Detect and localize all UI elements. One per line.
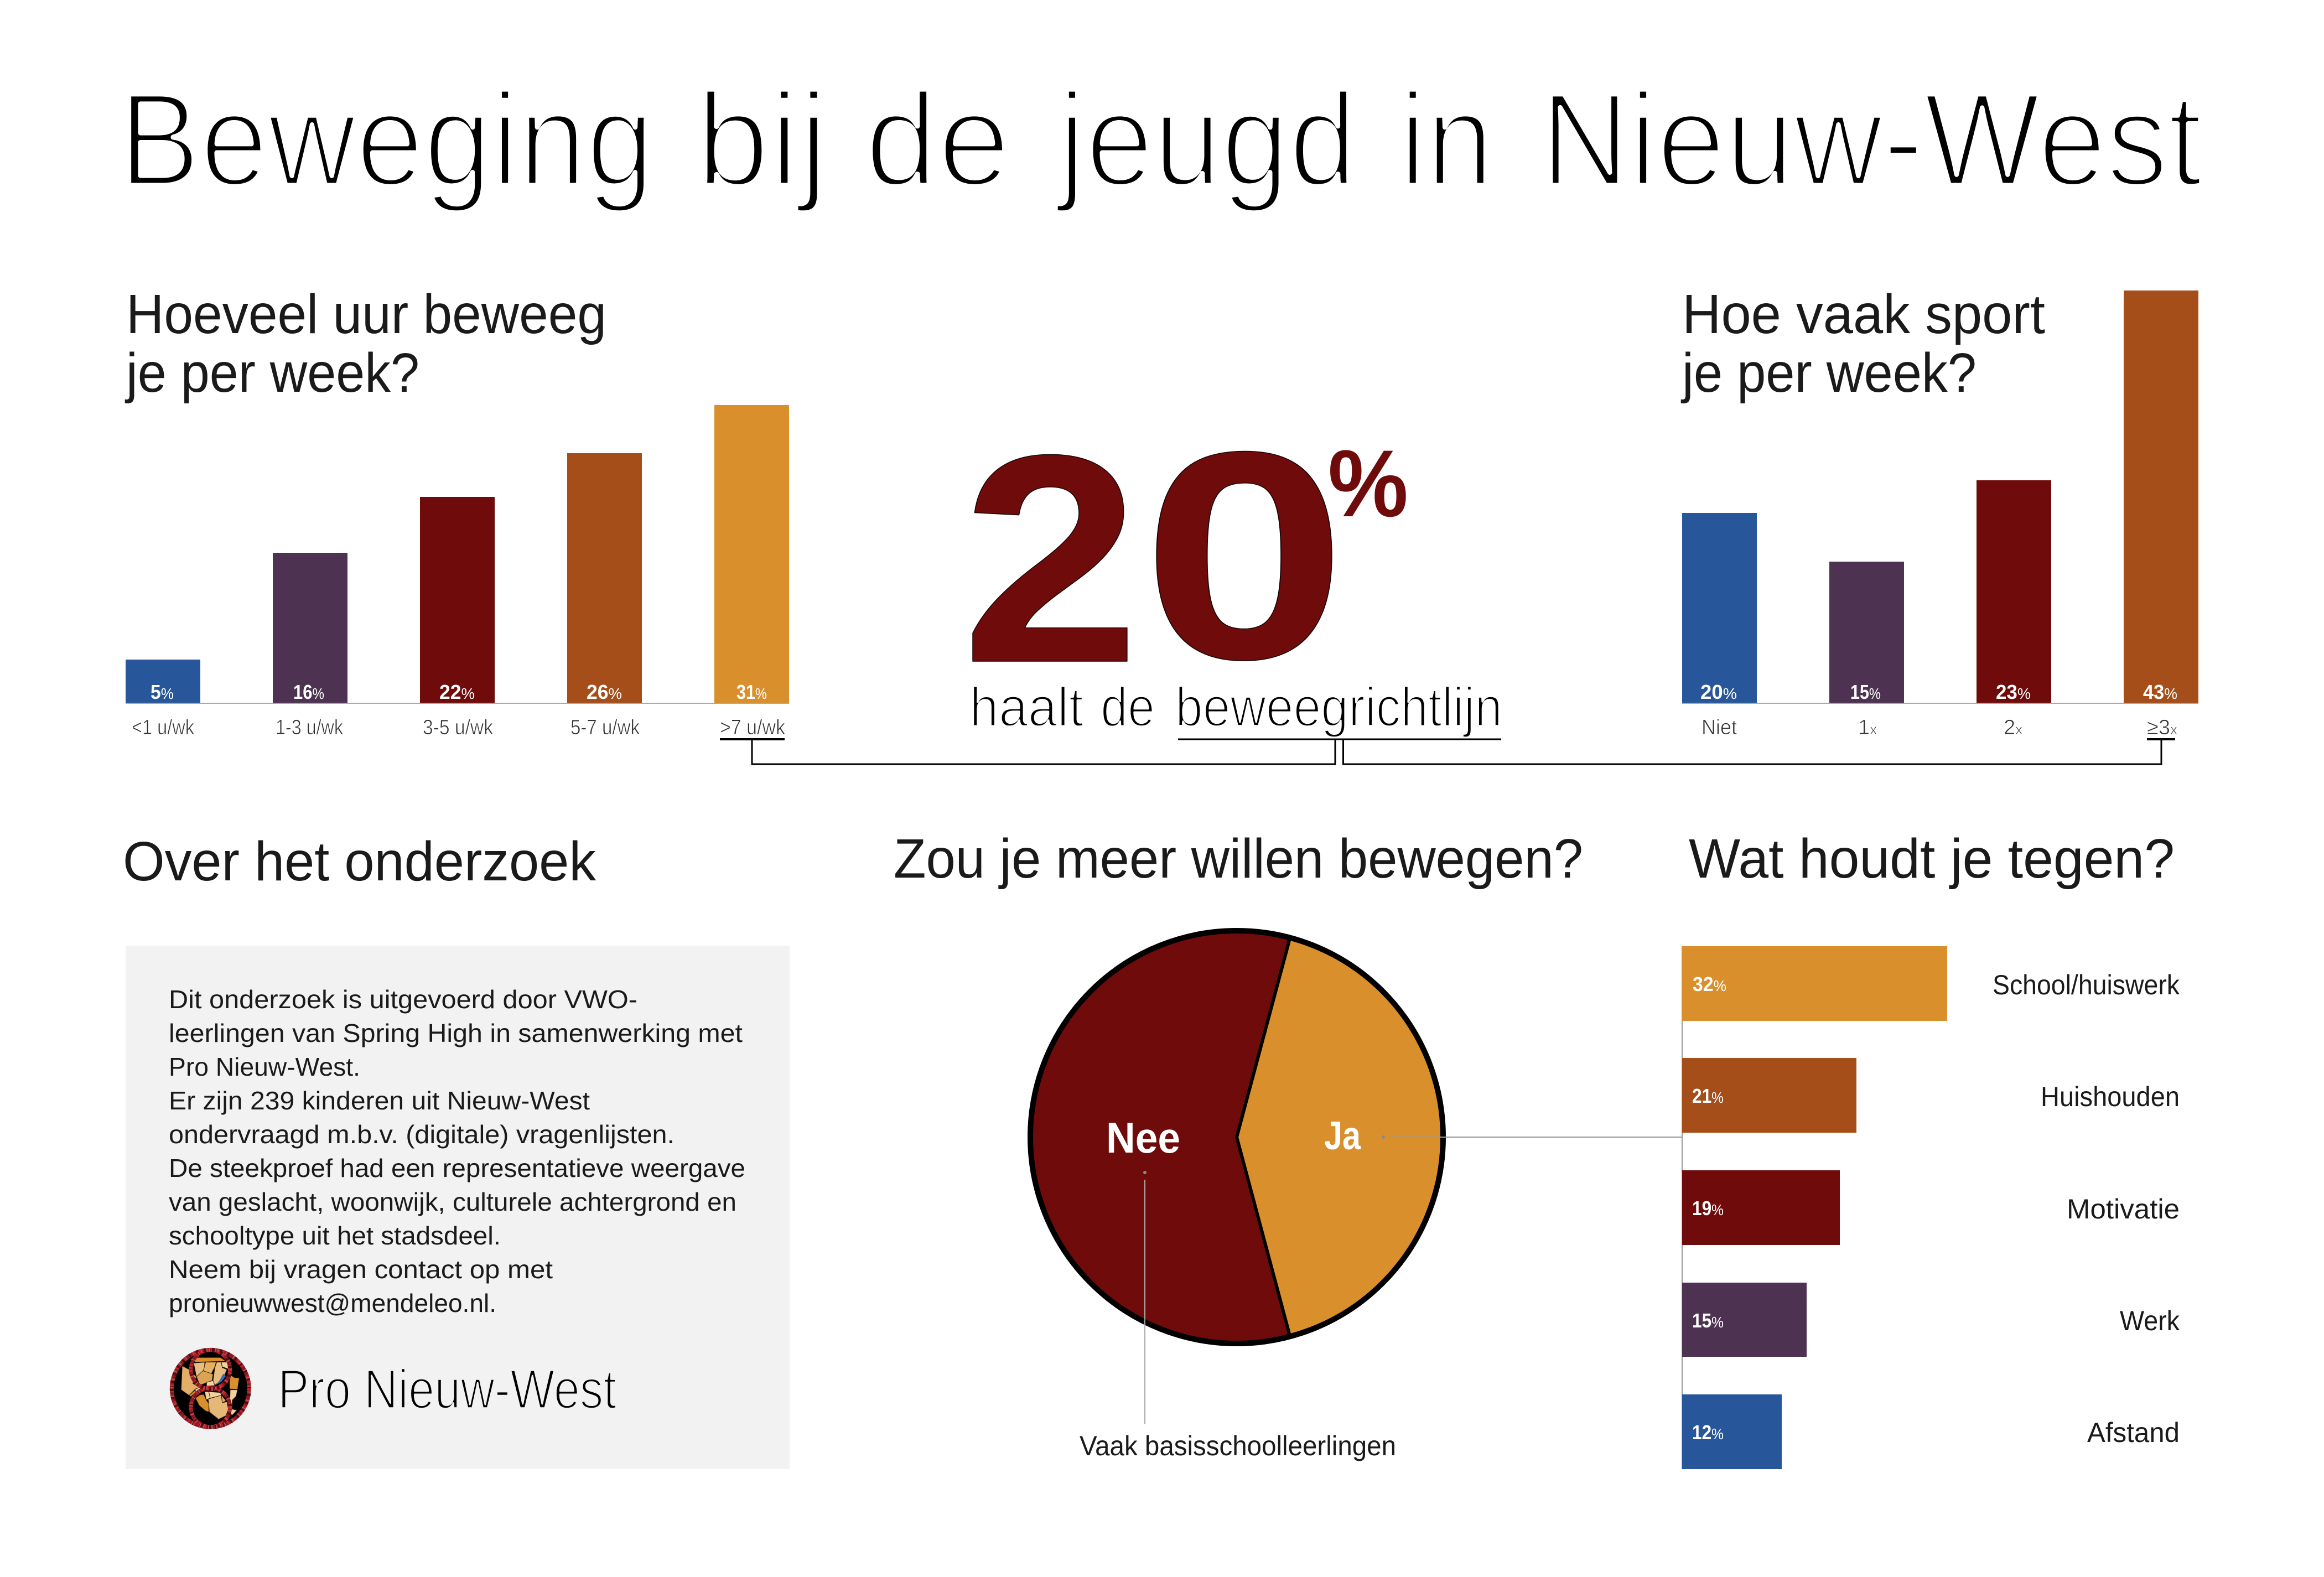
bar: 1-3 hours: 16% xyxy=(293,681,324,703)
bar: three or more: 43% xyxy=(2143,681,2177,703)
text block: research description: Er zijn 239 kinderen uit Nieuw-West xyxy=(169,1086,590,1115)
bar: school: School/huiswerk xyxy=(1993,969,2180,1000)
text block: research description: schooltype uit het stadsdeel. xyxy=(169,1221,501,1250)
text block: research description: Neem bij vragen contact op met xyxy=(169,1255,553,1284)
big number: 20 percent: 0 xyxy=(1142,391,1347,721)
text block: research description: pronieuwwest@mendeleo.nl. xyxy=(169,1289,496,1317)
icon: Pro Nieuw-West logo xyxy=(172,1350,249,1427)
bar: distance: Afstand xyxy=(2087,1417,2180,1448)
bar: twice xyxy=(1977,480,2051,703)
bar: school: 32% xyxy=(1693,973,1726,995)
logo wordmark: Pro Nieuw-West xyxy=(278,1358,616,1420)
title: in xyxy=(1399,65,1493,214)
bar: more than 7 hours: 31% xyxy=(736,681,767,703)
callout: no line xyxy=(1143,1171,1147,1424)
callout: yes leads to reasons xyxy=(1382,1135,1682,1139)
bar: distance: 12% xyxy=(1692,1421,1724,1444)
heading: hours per week: Hoeveel uur beweeg xyxy=(126,283,606,345)
text block: research description: Dit onderzoek is uitgevoerd door VWO- xyxy=(169,985,637,1014)
panel: hours per week chart xyxy=(124,283,789,739)
axis labels: 1-3 u/wk xyxy=(276,716,344,739)
pie label: no: Nee xyxy=(1106,1113,1180,1162)
axis labels: 1x xyxy=(1858,716,1877,739)
text block: research description: De steekproef had een representatieve weergave xyxy=(169,1154,745,1182)
bar: 5-7 hours xyxy=(567,453,642,703)
bar: once: 15% xyxy=(1850,681,1881,703)
text block: research description: ondervraagd m.b.v. (digitale) vragenlijsten. xyxy=(169,1120,675,1149)
panel: sports frequency chart xyxy=(1680,283,2198,739)
bar: 5-7 hours: 26% xyxy=(587,681,622,703)
axis labels: >7 u/wk xyxy=(720,716,786,739)
axis labels: ≥3x xyxy=(2147,716,2177,739)
axis labels: 5-7 u/wk xyxy=(570,716,640,739)
bar: three or more xyxy=(2124,290,2198,703)
title: de xyxy=(865,65,1010,214)
big number: 20 percent: 2 xyxy=(962,394,1140,724)
title: Beweging xyxy=(119,65,654,214)
bar: work xyxy=(1682,1283,2180,1357)
heading: how often do you sport xyxy=(1680,283,2045,404)
bar: motivation: Motivatie xyxy=(2067,1194,2180,1225)
axis labels: 3-5 u/wk xyxy=(423,716,494,739)
heading: how often do you sport: Hoe vaak sport xyxy=(1682,283,2045,345)
title xyxy=(119,65,2202,214)
subtitle: reaches the guideline xyxy=(969,676,1502,738)
axis labels xyxy=(132,716,786,739)
bar: not: 20% xyxy=(1700,681,1737,703)
bar: household xyxy=(1682,1058,2180,1133)
text block: research description: leerlingen van Spring High in samenwerking met xyxy=(169,1019,743,1047)
title: jeugd xyxy=(1055,65,1357,214)
heading: what holds you back: Wat houdt je tegen? xyxy=(1689,828,2175,890)
axis labels: 2x xyxy=(2004,716,2022,739)
axis labels: <1 u/wk xyxy=(132,716,195,739)
heading: how often do you sport: je per week? xyxy=(1680,342,1977,404)
bar: 3-5 hours xyxy=(420,497,495,703)
bar: school xyxy=(1682,946,2180,1021)
axis labels: Niet xyxy=(1702,716,1737,739)
bar: distance xyxy=(1682,1394,2180,1469)
pie label: yes: Ja xyxy=(1324,1114,1361,1158)
bar: motivation xyxy=(1682,1170,2180,1245)
heading: would you like to move more: Zou je meer willen bewegen? xyxy=(894,828,1583,890)
heading: hours per week xyxy=(124,283,606,404)
callout text: often primary school students: Vaak basisschoolleerlingen xyxy=(1080,1430,1396,1461)
bar: less than 1 hour: 5% xyxy=(151,681,174,703)
panel: barriers bar chart xyxy=(1682,946,2180,1469)
connector: bracket lines from guideline to charts xyxy=(720,739,2175,764)
heading: about the research: Over het onderzoek xyxy=(123,831,596,893)
big number: 20 percent xyxy=(962,391,1408,724)
subtitle: reaches the guideline: beweegrichtlijn xyxy=(1175,676,1502,738)
big number: 20 percent: % xyxy=(1328,430,1408,537)
panel: about the research xyxy=(126,946,790,1469)
bar: work: Werk xyxy=(2120,1305,2180,1336)
title: bij xyxy=(696,65,828,214)
text block: research description: Pro Nieuw-West. xyxy=(169,1052,360,1081)
bar: household: Huishouden xyxy=(2041,1081,2180,1112)
bar: motivation: 19% xyxy=(1692,1197,1724,1220)
pie chart xyxy=(1030,931,1443,1343)
bar: twice: 23% xyxy=(1996,681,2031,703)
bar: less than 1 hour xyxy=(126,660,200,703)
axis labels xyxy=(1702,716,2177,739)
bar: 3-5 hours: 22% xyxy=(439,681,475,703)
bar: once xyxy=(1829,562,1904,703)
subtitle: reaches the guideline: de xyxy=(1101,676,1155,738)
subtitle: reaches the guideline: haalt xyxy=(969,676,1083,738)
heading: hours per week: je per week? xyxy=(124,342,419,404)
title: Nieuw-West xyxy=(1540,65,2202,214)
bar: household: 21% xyxy=(1692,1085,1724,1107)
text block: research description xyxy=(169,985,745,1317)
bar: more than 7 hours xyxy=(714,405,789,703)
text block: research description: van geslacht, woonwijk, culturele achtergrond en xyxy=(169,1187,736,1216)
bar: work: 15% xyxy=(1692,1309,1724,1332)
bar: not xyxy=(1682,513,1757,703)
bar: 1-3 hours xyxy=(273,553,347,703)
